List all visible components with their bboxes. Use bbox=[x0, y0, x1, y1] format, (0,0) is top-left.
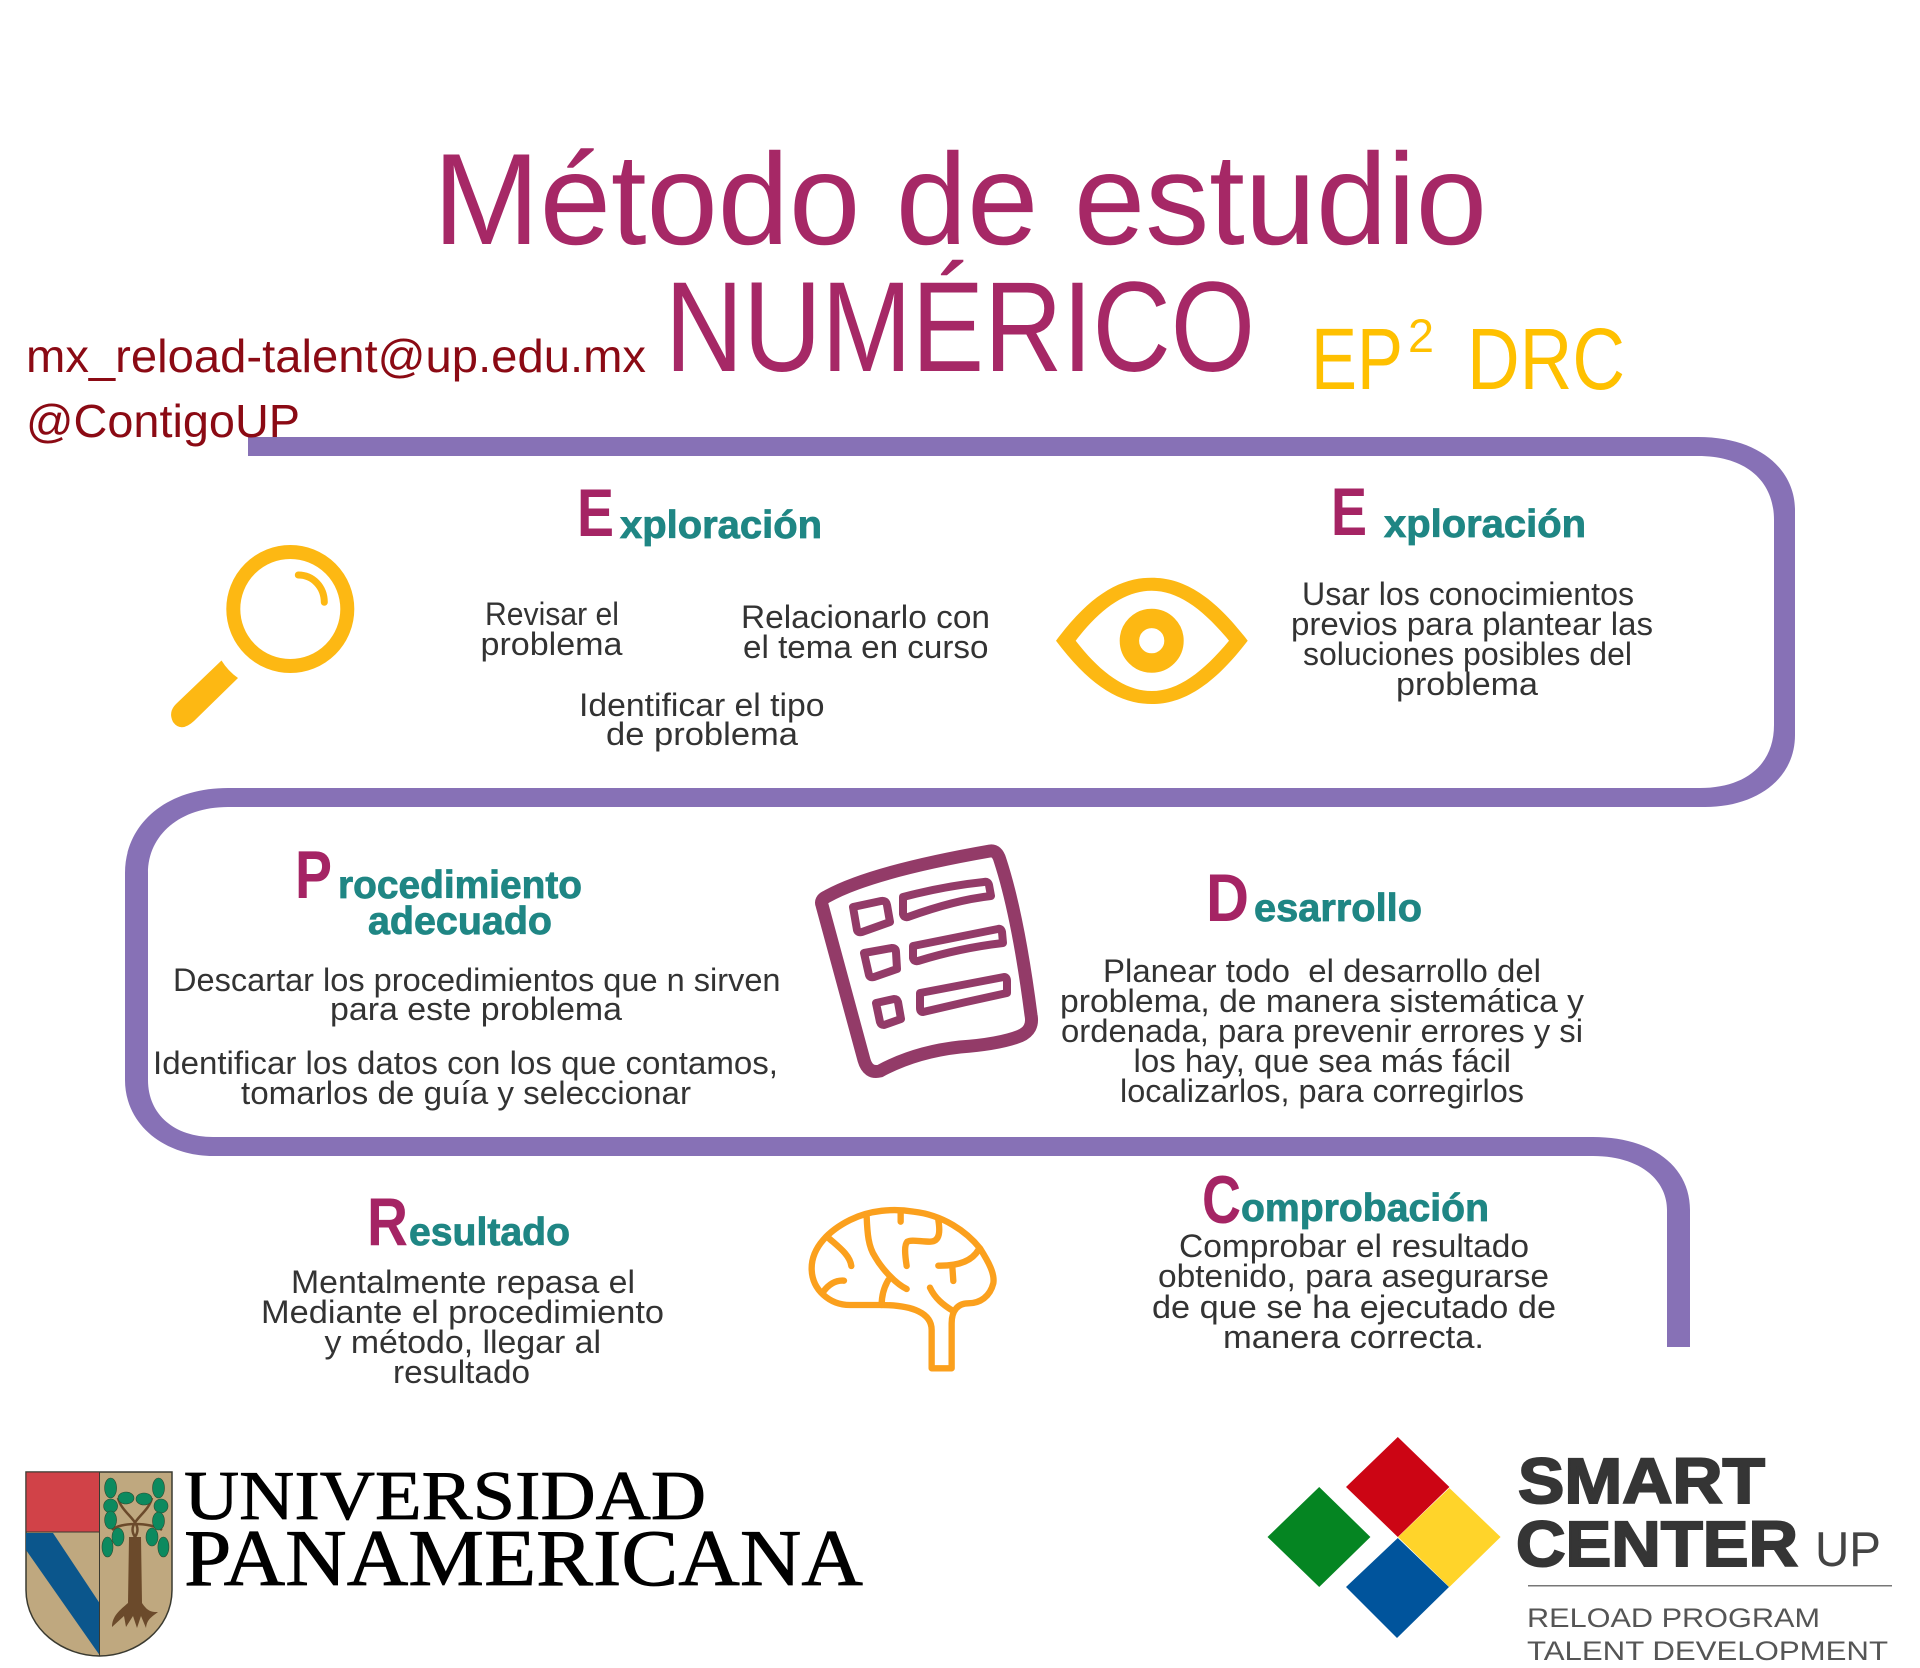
logo: Smart Center wordmark bbox=[1516, 1445, 1892, 1666]
text: discard procedures: para este problema bbox=[330, 991, 622, 1027]
heading: Exploración 1: xploración bbox=[620, 504, 822, 547]
text: identify data bbox=[153, 1045, 778, 1111]
logo: Smart Center wordmark: UP bbox=[1815, 1523, 1881, 1577]
text: relate to topic: Relacionarlo con bbox=[741, 599, 990, 635]
heading: Exploración 2: E bbox=[1331, 474, 1367, 550]
contact details bbox=[26, 330, 646, 447]
method acronym: EP bbox=[1311, 311, 1403, 408]
heading: Procedimiento adecuado bbox=[295, 837, 582, 943]
contact details: mx_reload-talent@up.edu.mx bbox=[26, 330, 646, 382]
heading: Exploración 1 bbox=[577, 475, 822, 551]
text: plan development bbox=[1060, 953, 1584, 1109]
text: discard procedures: Descartar los procedimientos que n sirven bbox=[173, 962, 780, 998]
logo: Smart Center wordmark: SMART bbox=[1518, 1445, 1765, 1517]
heading: Desarrollo: D bbox=[1206, 860, 1249, 936]
logo: Universidad Panamericana shield bbox=[26, 1472, 172, 1656]
text: plan development: los hay, que sea más fácil bbox=[1134, 1043, 1511, 1079]
text: identify problem type: Identificar el tipo bbox=[579, 687, 824, 723]
title: Método de estudio bbox=[433, 126, 1487, 272]
method acronym: 2 bbox=[1408, 309, 1434, 362]
text: identify data: tomarlos de guía y seleccionar bbox=[241, 1075, 691, 1111]
logo: Universidad Panamericana wordmark: PANAMERICANA bbox=[184, 1515, 863, 1603]
text: relate to topic bbox=[741, 599, 990, 665]
text: identify data: Identificar los datos con los que contamos, bbox=[153, 1045, 778, 1081]
contact details: @ContigoUP bbox=[26, 395, 300, 447]
text: use prior knowledge: problema bbox=[1396, 666, 1538, 702]
heading: Resultado: esultado bbox=[409, 1211, 570, 1254]
text: use prior knowledge: previos para plantear las bbox=[1291, 606, 1653, 642]
title: NUMÉRICO bbox=[665, 256, 1255, 399]
logo: Universidad Panamericana wordmark: UNIVERSIDAD bbox=[184, 1458, 706, 1535]
text: review result: Mediante el procedimiento bbox=[261, 1294, 664, 1330]
heading: Comprobación bbox=[1202, 1162, 1489, 1238]
text: plan development: localizarlos, para corregirlos bbox=[1120, 1073, 1524, 1109]
heading: Comprobación: C bbox=[1202, 1162, 1241, 1238]
text: verify result: obtenido, para asegurarse bbox=[1158, 1258, 1549, 1294]
text: identify problem type bbox=[579, 687, 824, 752]
text: review result: Mentalmente repasa el bbox=[291, 1264, 635, 1300]
text: review the problem: Revisar el bbox=[485, 596, 619, 632]
title bbox=[433, 126, 1487, 399]
icon: brain bbox=[812, 1210, 994, 1368]
logo: Smart Center wordmark: CENTER bbox=[1516, 1508, 1798, 1580]
text: review result bbox=[261, 1264, 664, 1390]
icon: magnifying glass bbox=[171, 552, 347, 727]
logo: Smart Center wordmark: TALENT DEVELOPMENT bbox=[1527, 1636, 1888, 1666]
icon: eye bbox=[1056, 578, 1248, 704]
heading: Desarrollo: esarrollo bbox=[1254, 887, 1422, 930]
text: identify problem type: de problema bbox=[606, 716, 798, 752]
heading: Comprobación: omprobación bbox=[1241, 1187, 1489, 1230]
text: review result: y método, llegar al bbox=[324, 1324, 601, 1360]
heading: Procedimiento adecuado: P bbox=[295, 837, 332, 913]
heading: Exploración 2 bbox=[1331, 474, 1586, 550]
text: review the problem bbox=[480, 596, 623, 662]
heading: Desarrollo bbox=[1206, 860, 1422, 936]
heading: Resultado bbox=[367, 1184, 570, 1260]
text: use prior knowledge: Usar los conocimientos bbox=[1302, 576, 1634, 612]
heading: Resultado: R bbox=[367, 1184, 408, 1260]
text: verify result: Comprobar el resultado bbox=[1179, 1228, 1529, 1264]
heading: Procedimiento adecuado: rocedimiento bbox=[338, 864, 582, 907]
heading: Exploración 1: E bbox=[577, 475, 614, 551]
heading: Procedimiento adecuado: adecuado bbox=[368, 900, 552, 943]
text: verify result: manera correcta. bbox=[1223, 1319, 1484, 1355]
method acronym: DRC bbox=[1467, 311, 1625, 408]
text: plan development: problema, de manera sistemática y bbox=[1060, 983, 1584, 1019]
text: plan development: ordenada, para prevenir errores y si bbox=[1061, 1013, 1583, 1049]
winding path bbox=[125, 437, 1795, 1347]
text: use prior knowledge bbox=[1291, 576, 1653, 702]
icon: checklist document bbox=[822, 851, 1032, 1072]
text: verify result bbox=[1152, 1228, 1556, 1355]
text: verify result: de que se ha ejecutado de bbox=[1152, 1289, 1556, 1325]
text: discard procedures bbox=[173, 962, 780, 1027]
heading: Exploración 2: xploración bbox=[1384, 503, 1586, 546]
text: use prior knowledge: soluciones posibles del bbox=[1303, 636, 1632, 672]
text: review the problem: problema bbox=[480, 626, 623, 662]
text: plan development: Planear todo el desarrollo del bbox=[1103, 953, 1541, 989]
text: review result: resultado bbox=[393, 1354, 530, 1390]
logo: Smart Center diamonds bbox=[1268, 1437, 1501, 1638]
logo: Universidad Panamericana wordmark bbox=[184, 1458, 863, 1603]
logo: Smart Center wordmark: RELOAD PROGRAM bbox=[1527, 1603, 1820, 1633]
method acronym bbox=[1311, 309, 1625, 408]
text: relate to topic: el tema en curso bbox=[743, 629, 988, 665]
